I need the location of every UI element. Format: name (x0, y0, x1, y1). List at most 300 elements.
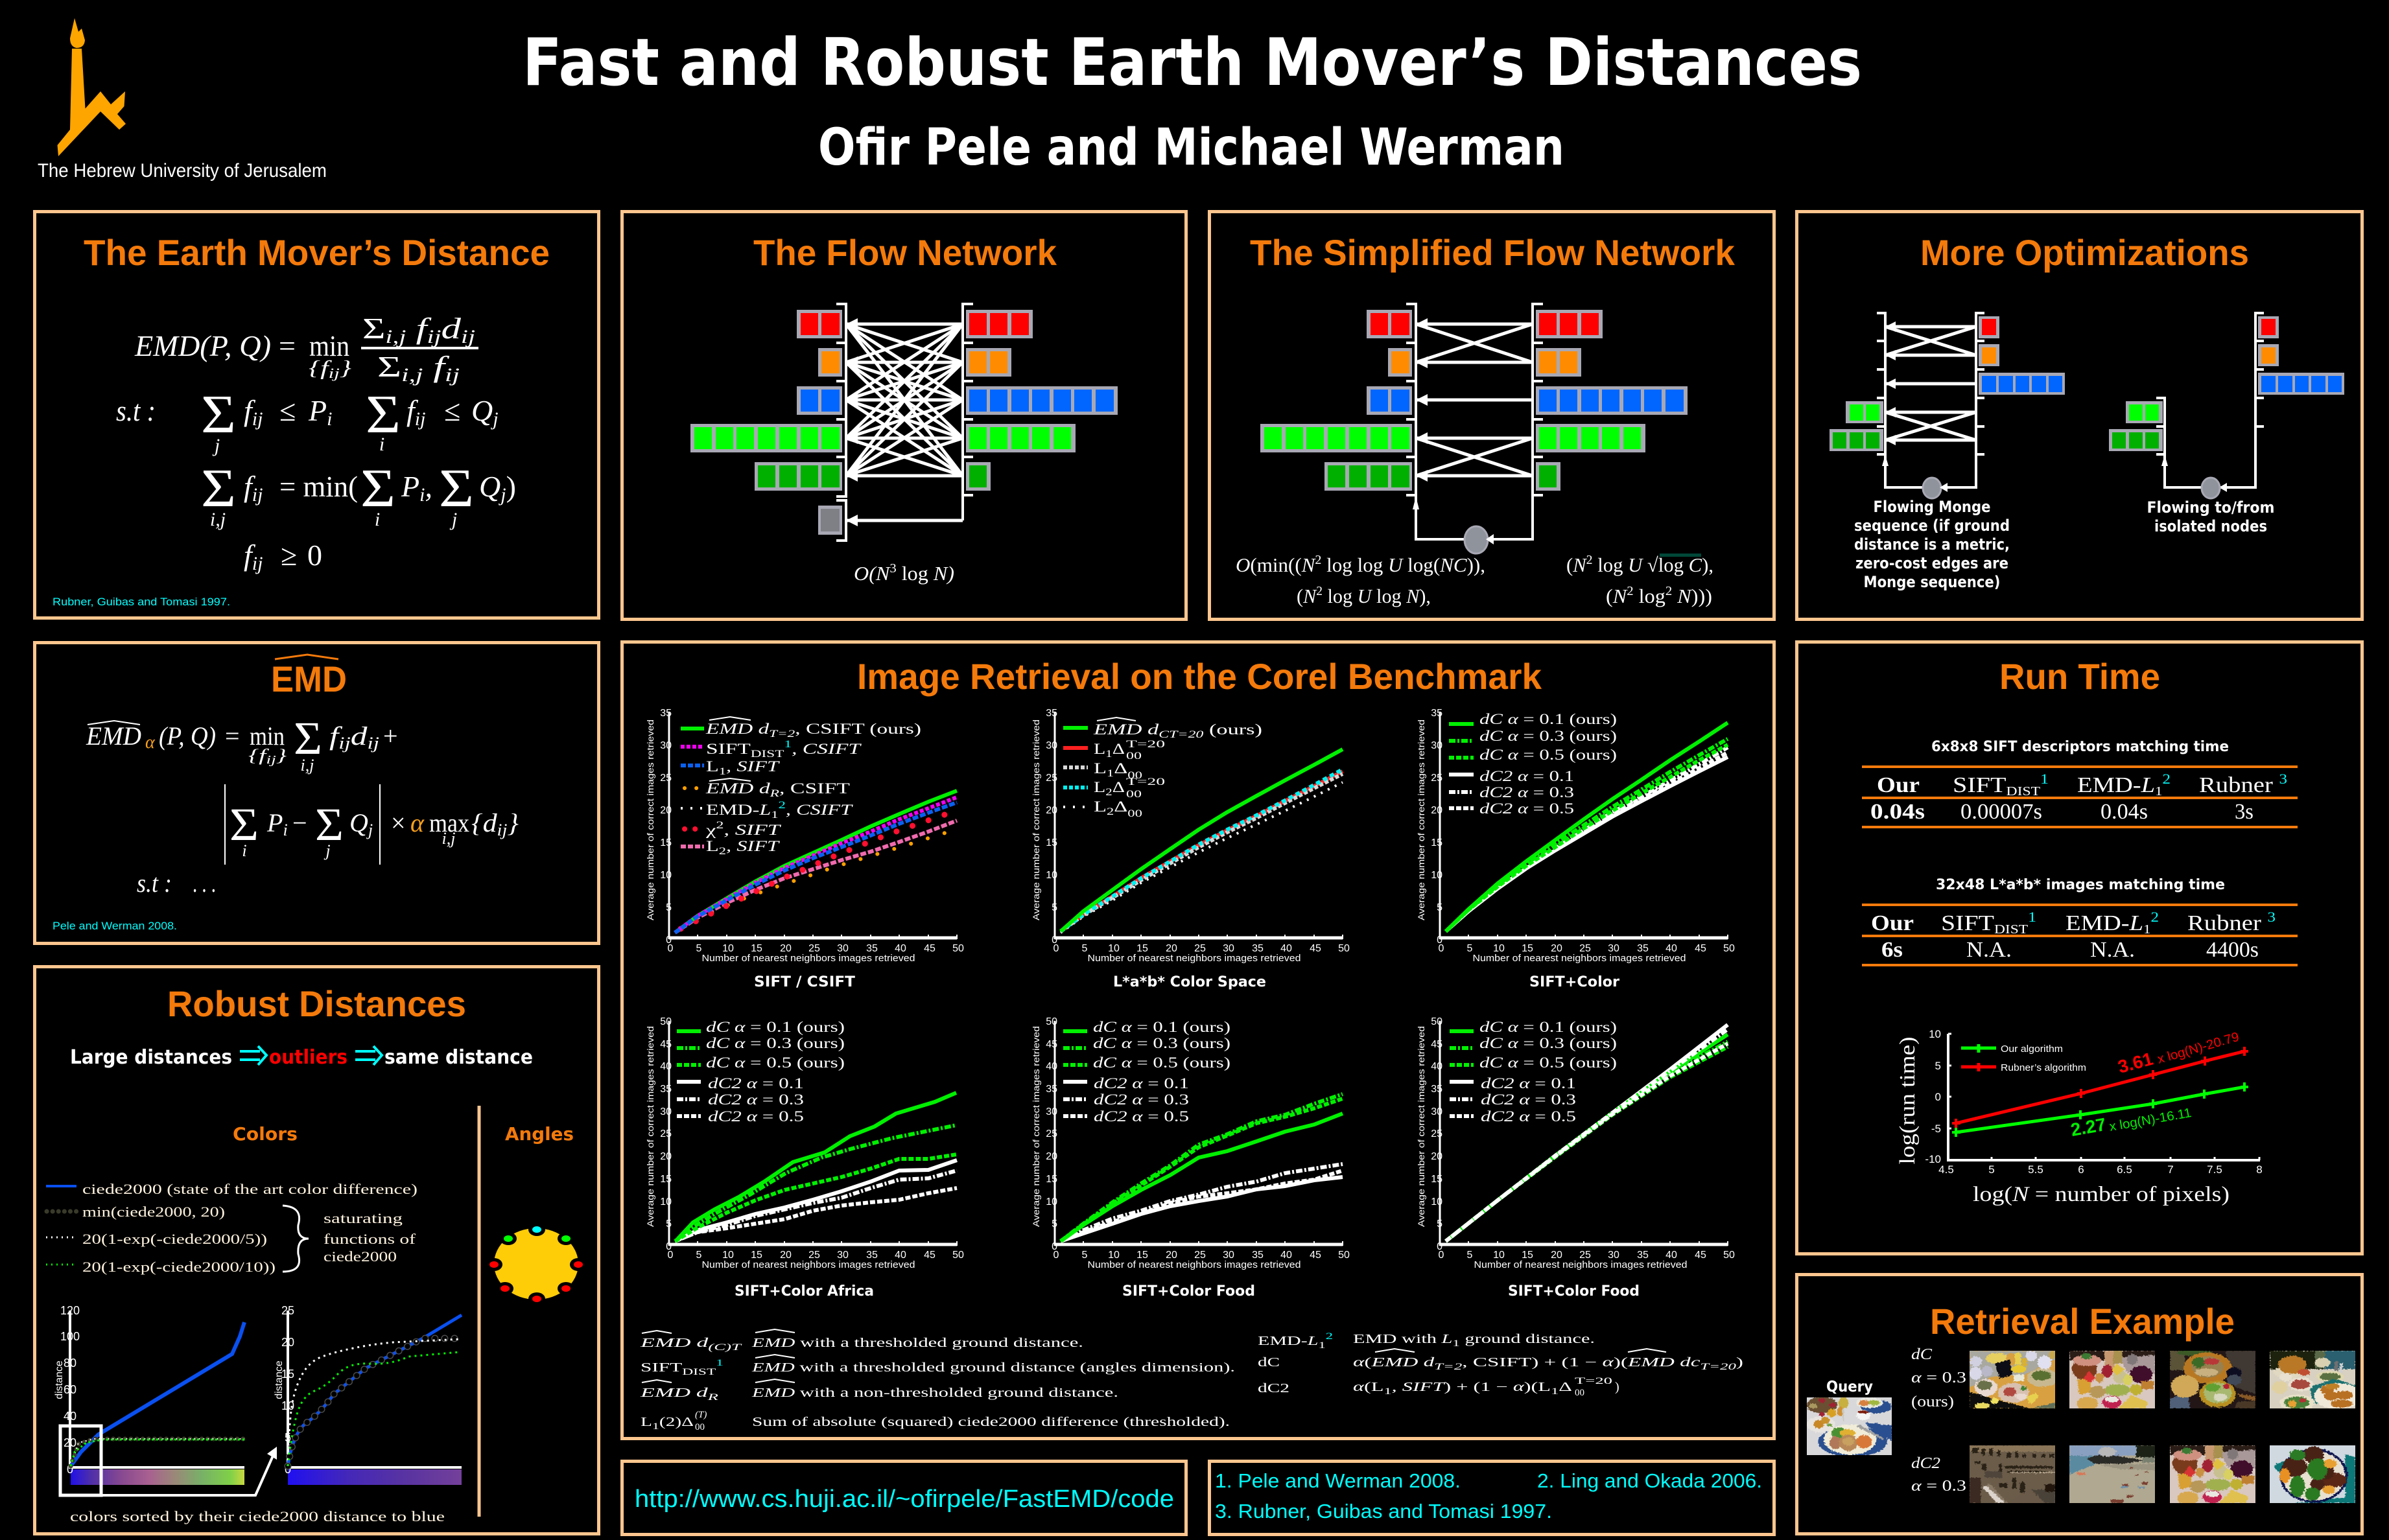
table: SIFT descriptors: DIST (2007, 784, 2040, 799)
edges (1416, 324, 1533, 476)
row label: dC: dC (1911, 1346, 1933, 1363)
axes: 45 (1695, 1250, 1706, 1261)
axes: 50 (952, 1250, 964, 1261)
formula: constraints: Σ (201, 384, 236, 445)
legend: distance functions: 20(1-exp(-ciede2000/5)) (82, 1231, 267, 1247)
glossary: right column: , SIFT (1392, 1380, 1446, 1394)
legend (681, 717, 921, 857)
glossary: left column: EMD with a thresholded ground distance (angles dimension). (751, 1360, 1235, 1375)
curves (1446, 723, 1728, 931)
glossary: right column: 2 (1326, 1331, 1333, 1342)
axes: 0 (1439, 1250, 1444, 1261)
axes: 30 (837, 1250, 849, 1261)
legend: T=20 (1126, 739, 1165, 750)
formula: EMD definition: EMD(P, Q) (134, 329, 271, 362)
chart: full distance range: 80 (64, 1357, 76, 1370)
axes: Number of nearest neighbors images retrieved (701, 953, 915, 964)
axes: 10 (1108, 943, 1120, 954)
formula: robust EMD: − (292, 808, 307, 837)
chart: zoomed distance range: distance (274, 1360, 285, 1399)
heading: Image Retrieval on the Corel Benchmark (857, 656, 1542, 697)
axes: 40 (1280, 943, 1292, 954)
axes: 0 (1935, 1091, 1941, 1103)
panel: More Optimizations (1797, 211, 2362, 620)
axes (1031, 708, 1350, 964)
axes: 45 (1310, 1250, 1321, 1261)
legend: dC α = 0.5 (ours) (1479, 1055, 1617, 1071)
axes: 25 (1194, 943, 1206, 954)
axes: 10 (1046, 1196, 1057, 1208)
glossary: left column: 1 (716, 1358, 724, 1368)
legend: dC α = 0.5 (ours) (706, 1055, 845, 1071)
axes: 0 (1437, 935, 1442, 946)
glossary: left column: SIFT (641, 1360, 667, 1375)
glossary: right column: T=20 (1575, 1376, 1612, 1386)
axes: 25 (660, 773, 672, 784)
formula: constraints: ij (415, 408, 425, 430)
axes: 25 (660, 1128, 672, 1139)
axes: Average number of correct images retrieved (645, 1026, 655, 1227)
formula: EMD definition (134, 312, 478, 386)
curves (1061, 749, 1343, 933)
axes: 10 (660, 1196, 672, 1208)
axes: Number of nearest neighbors images retrieved (701, 1259, 915, 1270)
series: Our algorithm (1952, 1082, 2248, 1137)
reference list: 1. Pele and Werman 2008. (1215, 1469, 1461, 1492)
axes: 5 (1467, 1250, 1473, 1261)
panel: EMD-hat (35, 643, 599, 944)
formula: constraints: j (449, 509, 457, 530)
image: dC result 4 (2270, 1351, 2355, 1408)
formula: robust EMD: } (507, 808, 519, 837)
chart: zoomed distance range: 15 (281, 1368, 294, 1381)
complexity text: 2 (1665, 584, 1672, 598)
legend: , SIFT (724, 822, 782, 838)
axes: 5 (696, 1250, 702, 1261)
axes: -10 (1925, 1153, 1941, 1165)
formula: EMD definition: {f (309, 356, 323, 379)
legend: T=20 (1126, 776, 1165, 788)
heading: Retrieval Example (1930, 1301, 2235, 1342)
axes: 35 (1046, 708, 1057, 719)
axes: Average number of correct images retrieved (1416, 1026, 1426, 1227)
axes: 50 (1338, 943, 1350, 954)
caption: SIFT / CSIFT (754, 974, 855, 990)
table: L*a*b* images: 1 (2028, 909, 2036, 925)
formula: constraints: Σ (201, 458, 236, 519)
legend (677, 1019, 845, 1125)
table: SIFT descriptors: 1 (2155, 784, 2163, 799)
axes: 35 (660, 708, 672, 719)
table: SIFT descriptors: 2 (2163, 771, 2171, 787)
panel: The Flow Network (622, 211, 1186, 620)
formula: EMD definition: ij (445, 364, 460, 386)
formula: robust EMD: × (391, 808, 406, 837)
complexity text: U log(NC)), (1388, 554, 1485, 576)
glossary: right column: ) + (1 − α )(L (1444, 1380, 1540, 1394)
axes: 5 (696, 943, 702, 954)
axes (1416, 708, 1735, 964)
formula: robust EMD: i (242, 841, 247, 860)
axes: Average number of correct images retrieved (645, 719, 655, 920)
formula: EMD definition: f (406, 312, 432, 345)
axes: 30 (1608, 1250, 1619, 1261)
note: Flowing Monge: Flowing Monge (1874, 498, 1990, 516)
glossary: right column: 1 (1383, 1386, 1392, 1397)
formula: constraints: f (244, 470, 252, 503)
legend: 00 (1126, 751, 1142, 762)
chart: L*a*b* Color Space (1031, 708, 1350, 990)
row label: dC2: α = 0.3 (1911, 1478, 1966, 1495)
complexity text: U √log C), (1628, 554, 1713, 576)
glossary: right column: α (L (1353, 1380, 1376, 1394)
plot legend: Rubner’s algorithm (2001, 1062, 2086, 1073)
legend: dC2 α = 0.5 (708, 1108, 804, 1125)
axes: 30 (1431, 1106, 1442, 1117)
legend: dC2 α = 0.3 (1481, 1091, 1576, 1108)
legend: distance functions: ciede2000 (324, 1248, 397, 1265)
formula: constraints: Q (479, 470, 500, 503)
legend: distance functions: ciede2000 (state of the art color difference) (82, 1181, 418, 1197)
axes: 8 (2256, 1163, 2263, 1176)
panel: The Earth Mover's Distance (35, 211, 599, 618)
table: L*a*b* images: Our (1871, 911, 1914, 935)
query image (1807, 1397, 1892, 1455)
table: L*a*b* images: SIFT (1941, 911, 1986, 935)
formula: constraints: ij (252, 408, 263, 430)
complexity text: (N (1566, 554, 1586, 576)
formula: robust EMD (86, 712, 519, 898)
complexity text: 2 (1315, 553, 1321, 567)
complexity text: O(min((N (1236, 554, 1315, 576)
legend: (ours) (1203, 721, 1262, 738)
glossary: right column: 1 (1452, 1338, 1460, 1349)
chart: full distance range: 20 (64, 1436, 76, 1449)
glossary: left column: 1 (652, 1421, 659, 1432)
glossary: right column: , CSIFT) + (1 − (1462, 1355, 1602, 1370)
legend: 1 (1107, 768, 1114, 779)
image: dC2 result 3 (2170, 1445, 2255, 1503)
legend: Δ (1112, 779, 1125, 795)
legend: Δ (1114, 799, 1127, 815)
axes: 15 (1431, 1174, 1442, 1185)
axes: Number of nearest neighbors images retrieved (1088, 953, 1300, 964)
table: L*a*b* images (1862, 877, 2298, 965)
axes: 25 (1194, 1250, 1206, 1261)
curves (675, 1093, 957, 1241)
legend: T=2 (769, 729, 795, 740)
formula: constraints: Q (471, 394, 493, 427)
note: isolated nodes (2147, 498, 2274, 535)
bins (2109, 316, 2344, 451)
legend: Δ (1112, 741, 1125, 757)
legend: 1 (1105, 749, 1112, 760)
supply and demand bins (690, 310, 1118, 491)
axes: 25 (1579, 943, 1591, 954)
note: Flowing Monge: distance is a metric, (1854, 535, 2010, 554)
formula: constraints: f (406, 394, 415, 427)
axes: 25 (808, 1250, 820, 1261)
axes: 5 (1052, 1219, 1057, 1230)
legend: 2 (1107, 806, 1114, 817)
heading: The Simplified Flow Network (1250, 232, 1736, 273)
axes: 35 (866, 1250, 878, 1261)
axes: 30 (1046, 1106, 1057, 1117)
plot legend (1961, 1044, 2086, 1073)
axes: 30 (1431, 740, 1442, 751)
complexity text: N (1672, 585, 1693, 607)
central node (1923, 478, 1941, 498)
heading: The Earth Mover’s Distance (84, 232, 550, 273)
chart: full distance range: 40 (64, 1410, 76, 1423)
caption: SIFT+Color (1529, 974, 1619, 990)
glossary: right column: EMD- L (1258, 1334, 1315, 1348)
legend: distance functions: functions of (324, 1231, 416, 1247)
axes (1416, 1016, 1735, 1270)
axes: 0 (1053, 943, 1059, 954)
image: dC result 1 (1970, 1351, 2055, 1408)
axes: 20 (1166, 1250, 1177, 1261)
formula: constraints: P (309, 394, 327, 427)
legend: dC α = 0.1 (ours) (1093, 1019, 1230, 1035)
formula: constraints: ) (506, 470, 516, 503)
heading: The Flow Network (753, 232, 1057, 273)
formula: constraints: ij (252, 553, 263, 574)
chart: full distance range: 0 (67, 1463, 73, 1476)
row label: dC (1911, 1346, 1966, 1410)
axes: 25 (1046, 1128, 1057, 1139)
axes: 20 (1046, 1151, 1057, 1162)
formula: constraints: j (498, 484, 506, 506)
legend: dC α = 0.3 (ours) (1093, 1035, 1230, 1051)
axes: 6.5 (2117, 1163, 2132, 1176)
table: L*a*b* images: 4400s (2206, 938, 2259, 962)
legend (1063, 718, 1262, 819)
formula: robust EMD: α (410, 808, 425, 837)
formula: EMD definition: d (441, 312, 462, 345)
formula: constraints: Σ (439, 458, 474, 519)
glossary: right column: α )( EMD dc (1602, 1355, 1671, 1370)
legend: EMD- L (706, 802, 768, 818)
panel: Retrieval Example (1797, 1274, 2362, 1534)
axes: 6 (2078, 1163, 2084, 1176)
formula: EMD definition: f (423, 350, 451, 383)
axes: 4.5 (1938, 1163, 1954, 1176)
axes: 20 (1551, 1250, 1562, 1261)
arrowheads (2161, 455, 2227, 492)
axes: 7 (2167, 1163, 2174, 1176)
formula: EMD definition: ij (461, 326, 475, 347)
formula: robust EMD: + (383, 721, 398, 751)
formula: robust EMD: Σ (315, 799, 344, 850)
formula: constraints: i,j (210, 509, 226, 530)
axes: 50 (952, 943, 964, 954)
axes: 15 (1136, 943, 1148, 954)
formula: robust EMD: (P, Q) (159, 721, 216, 751)
caption: SIFT+Color Food (1508, 1283, 1640, 1300)
legend: 1 (784, 739, 792, 750)
axes: 25 (1046, 773, 1057, 784)
chart: full distance range: 120 (60, 1304, 80, 1317)
formula: constraints: i (379, 434, 384, 455)
statement: outliers (70, 1046, 533, 1069)
formula: robust EMD: s.t : (137, 869, 172, 898)
axes: 25 (1431, 773, 1442, 784)
axes: 15 (660, 1174, 672, 1185)
glossary: right column: dC2 (1258, 1381, 1289, 1395)
panel: Image Retrieval on the Corel Benchmark (622, 642, 1774, 1439)
chart: zoomed distance range: 0 (285, 1463, 291, 1476)
formula: EMD definition: min (309, 329, 349, 362)
complexity text: log (1634, 585, 1665, 607)
axes: 35 (1252, 1250, 1264, 1261)
axes: 25 (1579, 1250, 1591, 1261)
legend: 2 (1105, 787, 1112, 798)
axes: 40 (895, 943, 906, 954)
formula: robust EMD: ij (266, 753, 276, 766)
axes: 0 (1439, 943, 1444, 954)
legend: dC2 α = 0.3 (708, 1091, 804, 1108)
axes: 40 (1280, 1250, 1292, 1261)
legend: dC α = 0.5 (ours) (1479, 747, 1617, 763)
axes: 10 (1431, 870, 1442, 881)
formula: constraints: ≤ (279, 394, 296, 427)
glossary: right column: ) (1736, 1355, 1743, 1370)
formula: robust EMD: i,j (442, 829, 455, 848)
table: L*a*b* images: EMD- L (2065, 911, 2142, 935)
edges (1885, 327, 1976, 440)
formula: constraints: ≥ (281, 539, 297, 572)
table: L*a*b* images: 6s (1881, 938, 1903, 962)
complexity: N) (934, 562, 954, 585)
image: dC result 3 (2170, 1351, 2255, 1408)
legend: CT=20 (1159, 729, 1203, 740)
caption: colors sorted by their ciede2000 distance to blue (70, 1508, 445, 1524)
chart: full distance range: 60 (64, 1383, 76, 1396)
axes: 0 (1052, 935, 1057, 946)
axes: 10 (1493, 1250, 1505, 1261)
formula: constraints: = min( (279, 470, 358, 503)
logo: Hebrew University: The Hebrew University of Jerusalem (38, 160, 327, 181)
legend: dC α = 0.1 (ours) (1479, 1019, 1617, 1035)
table: SIFT descriptors: 1 (2040, 771, 2049, 787)
glossary: right column: α (EMD d (1353, 1355, 1409, 1370)
axes: 35 (1046, 1084, 1057, 1095)
glossary: left column: EMD with a thresholded ground distance. (751, 1336, 1083, 1350)
formula: EMD definition: ij (329, 365, 340, 381)
caption: SIFT+Color Food (1122, 1283, 1255, 1300)
node columns and circulation edge (1406, 304, 1543, 539)
formula: robust EMD: ij (367, 734, 379, 752)
axes: 30 (1223, 1250, 1234, 1261)
table: L*a*b* images: 32x48 L*a*b* images matching time (1936, 877, 2225, 893)
columns (1877, 313, 1984, 487)
axes: 0 (666, 1241, 672, 1252)
axes: log(run time) (1896, 1037, 1920, 1164)
chart: run time vs pixels (1896, 1028, 2263, 1206)
legend: , SIFT (726, 758, 781, 775)
complexity text: ))) (1691, 585, 1712, 607)
axes: 50 (1723, 943, 1735, 954)
fit labels: 3.61 (2116, 1049, 2155, 1077)
formula: constraints: ij (252, 484, 263, 506)
axes: 10 (722, 943, 734, 954)
complexity text: 2 (1586, 553, 1593, 567)
axes: 20 (1551, 943, 1562, 954)
axes: 5 (1467, 943, 1473, 954)
formula: robust EMD: j (366, 821, 373, 839)
image: dC2 result 4 (2270, 1445, 2355, 1503)
columns (2156, 313, 2264, 487)
formula: robust EMD: f (329, 721, 336, 751)
glossary: right column: dC (1258, 1355, 1280, 1370)
glossary: right column: EMD with L (1353, 1332, 1449, 1346)
legend: 00 (1127, 808, 1142, 819)
formula: constraints: P (401, 470, 419, 503)
legend: Δ (1114, 760, 1127, 776)
legend: distance functions: saturating (324, 1210, 403, 1226)
axes: 10 (1046, 870, 1057, 881)
axes: 15 (1522, 943, 1533, 954)
formula: constraints: , (425, 470, 432, 503)
legend: L (1094, 799, 1103, 815)
diagram: isolated nodes (2109, 313, 2344, 498)
fit labels: x log(N)-20.79 (2156, 1030, 2241, 1067)
simplified flow network diagram (1260, 304, 1688, 554)
legend: dC2 α = 0.5 (1094, 1108, 1189, 1125)
legend (1450, 1019, 1617, 1125)
axes: 10 (722, 1250, 734, 1261)
formula: robust EMD: ij (338, 734, 351, 752)
table: L*a*b* images: 1 (2143, 922, 2151, 937)
legend: , CSIFT (792, 741, 862, 757)
caption: L*a*b* Color Space (1113, 974, 1266, 990)
complexity: O(N (854, 562, 888, 585)
axes: 15 (1046, 837, 1057, 848)
axes: 40 (1046, 1061, 1057, 1072)
axes: 25 (808, 943, 820, 954)
axes: 15 (1136, 1250, 1148, 1261)
formula: robust EMD: d (351, 721, 368, 751)
axes: 35 (1431, 708, 1442, 719)
axes: 30 (837, 943, 849, 954)
legend: distance functions: min(ciede2000, 20) (82, 1204, 225, 1220)
axes: 50 (1723, 1250, 1735, 1261)
image: dC2 result 2 (2069, 1445, 2155, 1503)
formula: constraints: 0 (307, 539, 322, 572)
legend: dC2 α = 0.1 (1481, 1075, 1576, 1091)
complexity text (1236, 553, 1713, 607)
formula: constraints: Σ (366, 384, 401, 445)
series: Rubner's algorithm (1952, 1047, 2248, 1128)
axes: 5 (1437, 1219, 1442, 1230)
legend: L (706, 758, 715, 775)
note: Flowing Monge: zero-cost edges are (1855, 554, 2008, 572)
axes: 30 (1223, 943, 1234, 954)
axes: 30 (1608, 943, 1619, 954)
legend: L (1094, 741, 1103, 757)
glossary: left column: R (707, 1392, 718, 1403)
title: Fast and Robust Earth Mover’s Distances (523, 24, 1862, 100)
legend: 2 (779, 800, 786, 811)
axes: 50 (1338, 1250, 1350, 1261)
chart: zoomed distance range: 25 (281, 1304, 294, 1317)
axes: 0 (668, 1250, 674, 1261)
panel: Robust Distances (35, 967, 599, 1534)
glossary: right column (1258, 1331, 1743, 1398)
axes: 5 (1437, 902, 1442, 913)
axes: 5 (1935, 1060, 1941, 1072)
